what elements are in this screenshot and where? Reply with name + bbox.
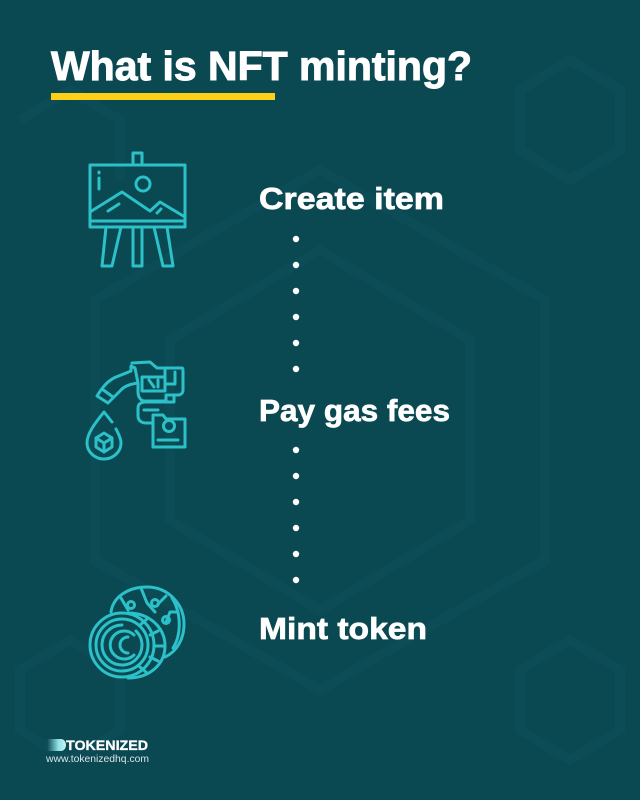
logo: tokenized — [45, 738, 149, 765]
dotted connector: pay gas fees to mint token — [293, 447, 299, 583]
title: What is NFT minting? — [51, 43, 472, 89]
icon: easel with painting — [90, 153, 185, 266]
icon: stacked digital coins — [90, 587, 184, 678]
icon: fuel nozzle with token drop — [87, 362, 185, 459]
title underline — [51, 93, 275, 100]
dotted connector: create item to pay gas fees — [293, 236, 299, 372]
step label: pay gas fees: Pay gas fees — [259, 393, 450, 428]
logo wordmark: TOKENIZED — [66, 738, 148, 753]
website url: www.tokenizedhq.com — [45, 753, 149, 765]
step label: mint token: Mint token — [259, 611, 427, 646]
step label: create item: Create item — [259, 181, 444, 216]
logo mark — [47, 739, 66, 751]
